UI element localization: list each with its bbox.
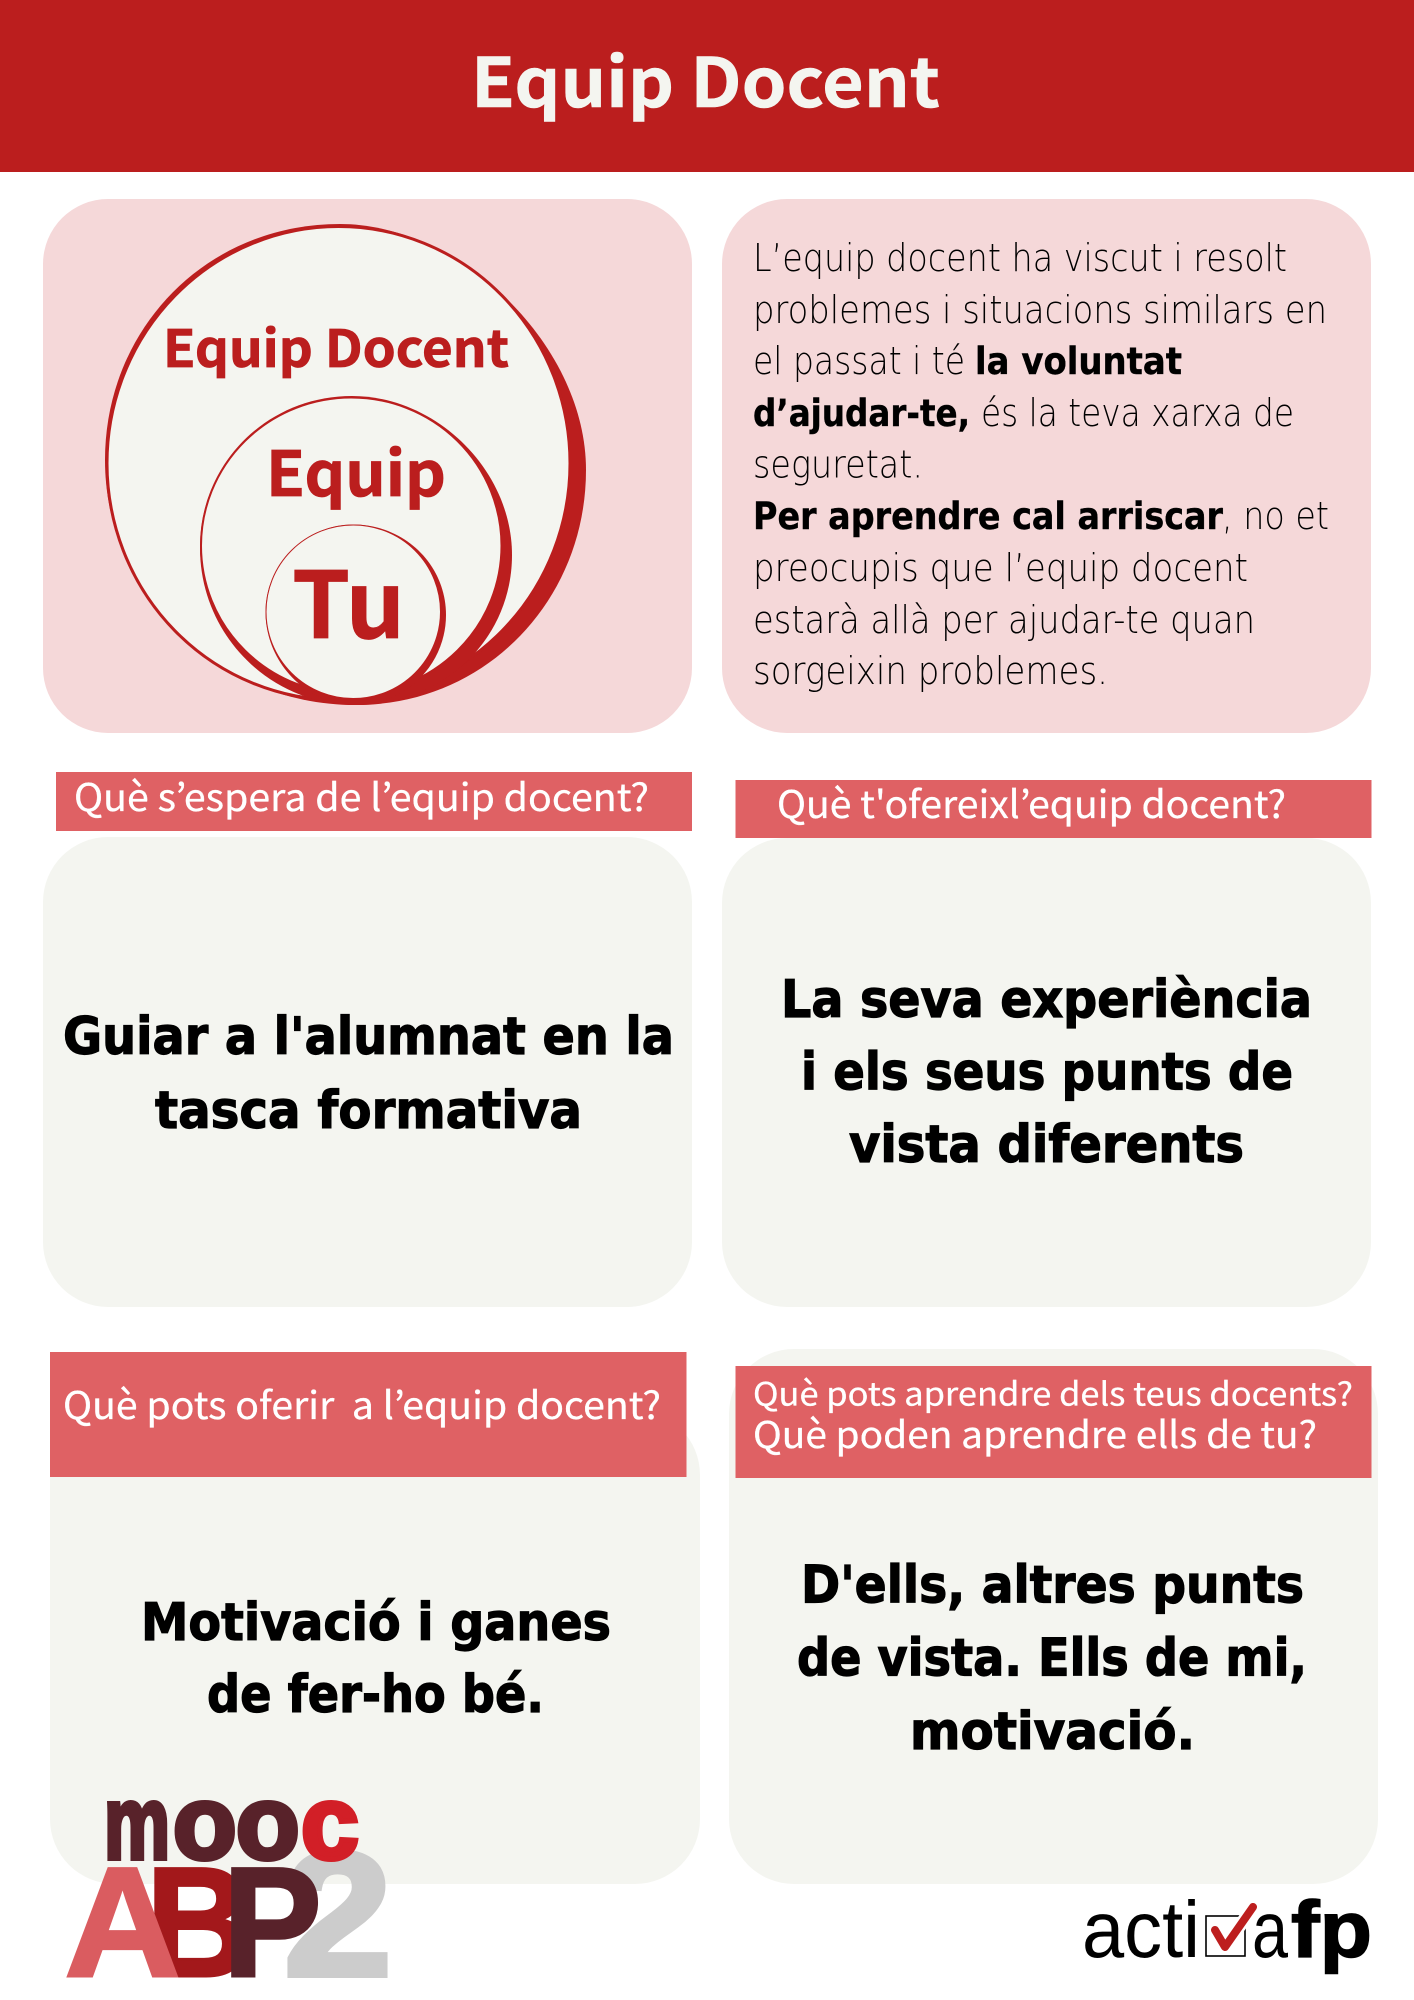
card: Què pots aprendre: Què poden aprendre ells de tu? <box>753 1405 1317 1459</box>
paragraph: d’ajudar-te, <box>753 392 970 435</box>
circle: Equip Docent: Equip Docent <box>163 308 509 382</box>
card answer: D'ells, altres punts <box>801 1556 1304 1616</box>
card answer: vista diferents <box>849 1115 1244 1175</box>
card: Què pots aprendre <box>729 1349 1378 1884</box>
card answer: i els seus punts de <box>801 1042 1293 1102</box>
card answer <box>797 1556 1307 1762</box>
card: Què s'espera de l'equip docent <box>43 767 692 1307</box>
card answer: motivació. <box>910 1702 1195 1762</box>
card answer: Guiar a l'alumnat en la <box>63 1007 674 1067</box>
header banner <box>0 0 1414 172</box>
paragraph: és la teva xarxa de <box>981 391 1294 435</box>
card answer <box>141 1593 611 1725</box>
paragraph: , no et <box>1222 494 1329 538</box>
title: Equip Docent <box>471 28 940 127</box>
logo: activa fp: acti <box>1082 1885 1200 1974</box>
logo: MOOC ABP 2: m <box>104 1766 170 1882</box>
logo: activa fp: fp <box>1291 1885 1372 1974</box>
paragraph: estarà allà per ajudar-te quan <box>753 598 1255 642</box>
logo: MOOC ABP 2: c <box>301 1766 359 1882</box>
circle: Equip Docent <box>105 224 586 705</box>
paragraph: Per aprendre cal arriscar <box>753 495 1224 538</box>
card answer: Motivació i ganes <box>141 1593 611 1653</box>
icon: checkbox with red tick <box>1206 1907 1253 1956</box>
card answer: La seva experiència <box>781 970 1312 1030</box>
paragraph: seguretat. <box>753 442 923 486</box>
card answer: de vista. Ells de mi, <box>797 1628 1307 1688</box>
card: Què pots aprendre: Què pots aprendre dels teus docents? <box>753 1370 1353 1416</box>
circle: Tu: Tu <box>292 532 405 665</box>
circle: Equip: Equip <box>266 424 446 514</box>
paragraph: L’equip docent ha viscut i resolt <box>753 236 1287 280</box>
paragraph: sorgeixin problemes. <box>753 649 1108 693</box>
logo: MOOC ABP 2: o <box>173 1766 237 1882</box>
logo: MOOC ABP 2 <box>64 1766 392 2000</box>
logo: MOOC ABP 2: o <box>236 1766 300 1882</box>
card answer: de fer-ho bé. <box>207 1665 544 1725</box>
paragraph: preocupis que l’equip docent <box>753 546 1248 590</box>
logo: activa fp: a <box>1252 1885 1288 1974</box>
card answer <box>63 1007 674 1141</box>
circle: Tu <box>266 524 446 705</box>
card answer: tasca formativa <box>155 1081 582 1141</box>
card: Què s'espera de l'equip docent: Què s’espera de l’equip docent? <box>74 767 649 822</box>
logo: activa fp <box>1082 1885 1372 1974</box>
paragraph <box>753 236 1329 693</box>
card: Què t'ofereix l'equip docent: Què t'ofereixl’equip docent? <box>777 774 1286 829</box>
card: Què pots oferir a l'equip docent <box>50 1352 700 1884</box>
paragraph: el passat i té <box>753 339 965 383</box>
card: Què t'ofereix l'equip docent <box>722 774 1372 1307</box>
panel: intro text <box>722 199 1371 733</box>
paragraph: problemes i situacions similars en <box>753 288 1327 332</box>
card: Què pots oferir a l'equip docent: Què pots oferir a l’equip docent? <box>63 1375 661 1430</box>
card answer <box>781 970 1312 1175</box>
panel: nested circles diagram <box>43 199 692 733</box>
circle: Equip <box>200 396 512 705</box>
paragraph: la voluntat <box>975 340 1182 383</box>
